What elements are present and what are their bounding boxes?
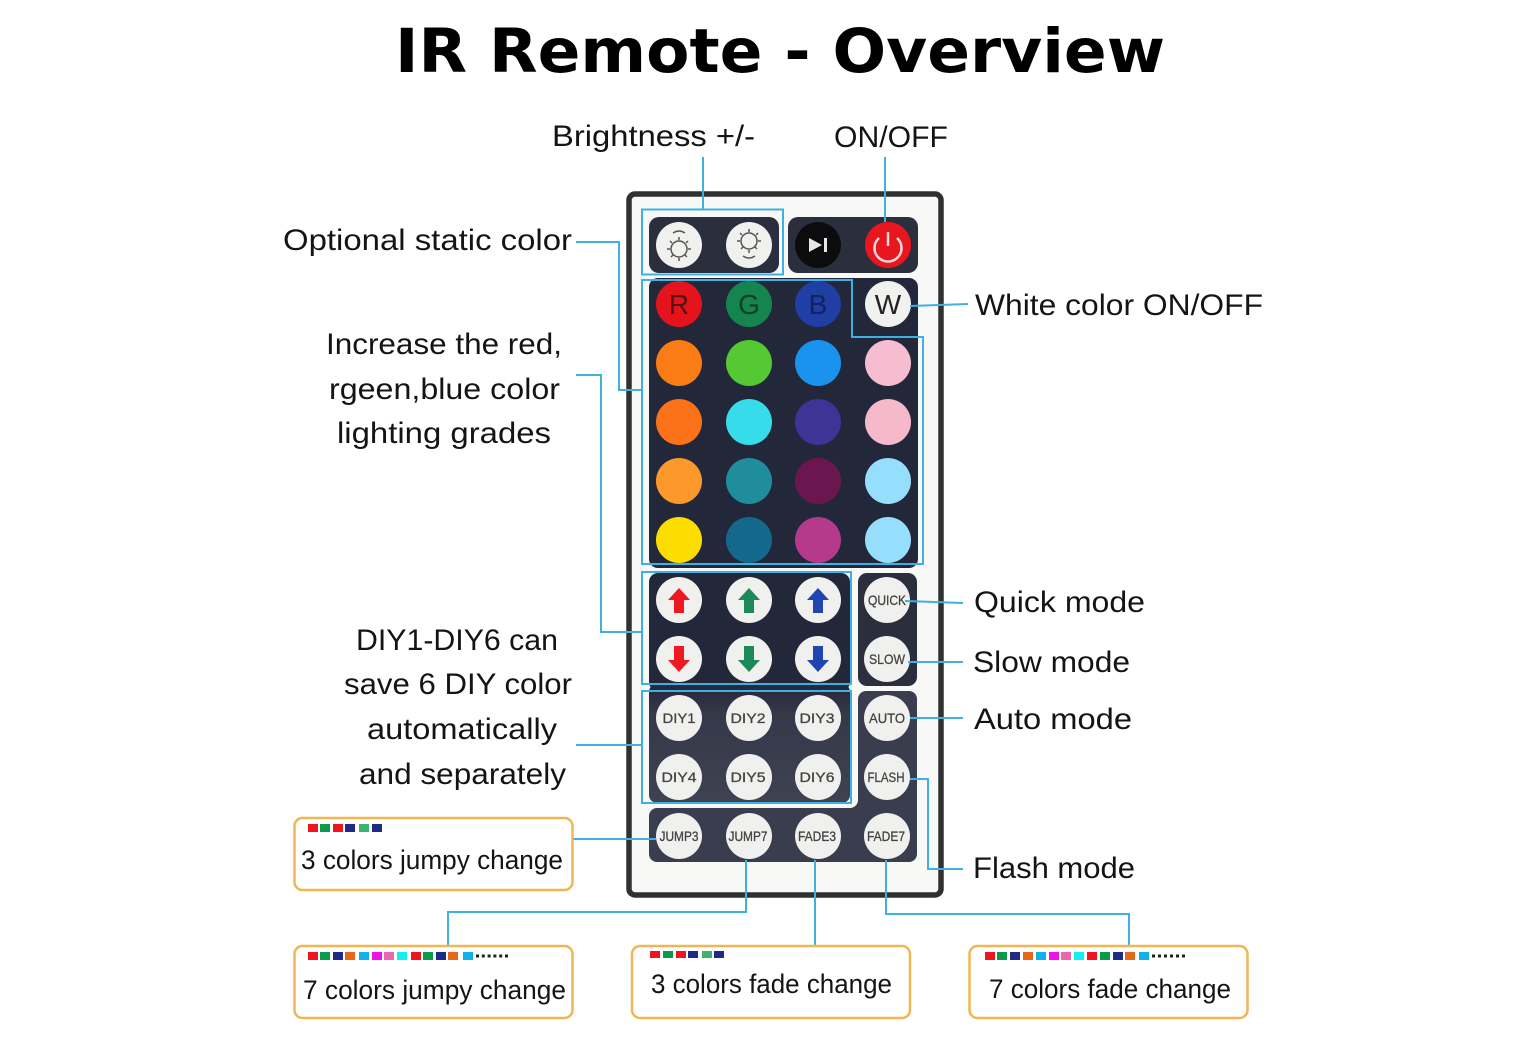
text block: increase grades: rgeen,blue color [329,373,560,406]
callout: 7 colors jumpy change: 7 colors jumpy change [303,975,566,1005]
arrow buttons [656,577,841,682]
panel: arrow keys [649,573,850,691]
panel: brightness keys [649,217,779,273]
mode and DIY buttons: AUTO [869,710,905,726]
icon: power button [865,222,911,268]
text block: increase grades: Increase the red, [326,328,562,361]
mode and DIY buttons: DIY1 [662,710,696,726]
remote control [629,194,941,895]
label: Brightness: Brightness +/- [552,120,755,153]
callout: 3 colors jumpy change: 3 colors jumpy change [301,845,563,875]
text block: DIY description: and separately [359,758,566,791]
label: Optional static color: Optional static color [283,224,572,257]
callout: 3 colors jumpy change [294,818,572,890]
panel: colour keys [649,278,918,568]
callout: 7 colors jumpy change [294,946,572,1018]
icon: brightness down button [726,222,772,268]
mode and DIY buttons: FADE7 [867,828,905,844]
mode and DIY buttons: SLOW [869,651,906,667]
colour buttons: W [875,289,902,320]
colour buttons [656,281,911,563]
label: ON/OFF: ON/OFF [834,121,948,154]
icon: brightness up button [656,222,702,268]
mode and DIY buttons: QUICK [868,592,907,608]
text block: DIY description: save 6 DIY color [344,668,572,701]
mode and DIY buttons: DIY4 [662,769,697,785]
icon: play pause button [795,222,841,268]
mode and DIY buttons [656,577,910,859]
remote body [629,194,941,895]
callout: 3 colors fade change: 3 colors fade change [651,969,892,999]
highlight outlines and leader lines [448,157,1129,946]
panel: auto and flash keys [649,691,917,862]
label: Quick mode: Quick mode [974,586,1145,619]
title: IR Remote - Overview [395,16,1165,87]
callout: 7 colors fade change [970,946,1248,1018]
label: Slow mode: Slow mode [973,646,1130,679]
text block: DIY description [344,624,572,791]
text block: increase grades [326,328,562,450]
mode and DIY buttons: DIY5 [730,769,766,785]
mode and DIY buttons: FLASH [868,769,904,785]
panel: DIY keys [649,684,850,803]
mode and DIY buttons: JUMP3 [660,828,699,844]
panel: play and power keys [788,217,918,273]
panel: quick and slow keys [858,573,917,686]
text block: DIY description: automatically [367,713,557,746]
label: Auto mode: Auto mode [974,703,1132,736]
mode and DIY buttons: JUMP7 [728,828,768,844]
colour buttons: R [669,289,689,320]
mode and DIY buttons: DIY2 [730,710,766,726]
colour buttons: G [738,289,760,320]
label: White color ON/OFF: White color ON/OFF [975,289,1263,322]
text block: increase grades: lighting grades [337,417,551,450]
mode and DIY buttons: DIY6 [800,769,835,785]
callout: 3 colors fade change [632,946,910,1018]
colour buttons: B [809,289,827,320]
label: Flash mode: Flash mode [973,852,1135,885]
callout: 7 colors fade change: 7 colors fade change [989,974,1231,1004]
mode and DIY buttons: FADE3 [798,828,836,844]
text block: DIY description: DIY1-DIY6 can [356,624,558,657]
mode and DIY buttons: DIY3 [800,710,835,726]
